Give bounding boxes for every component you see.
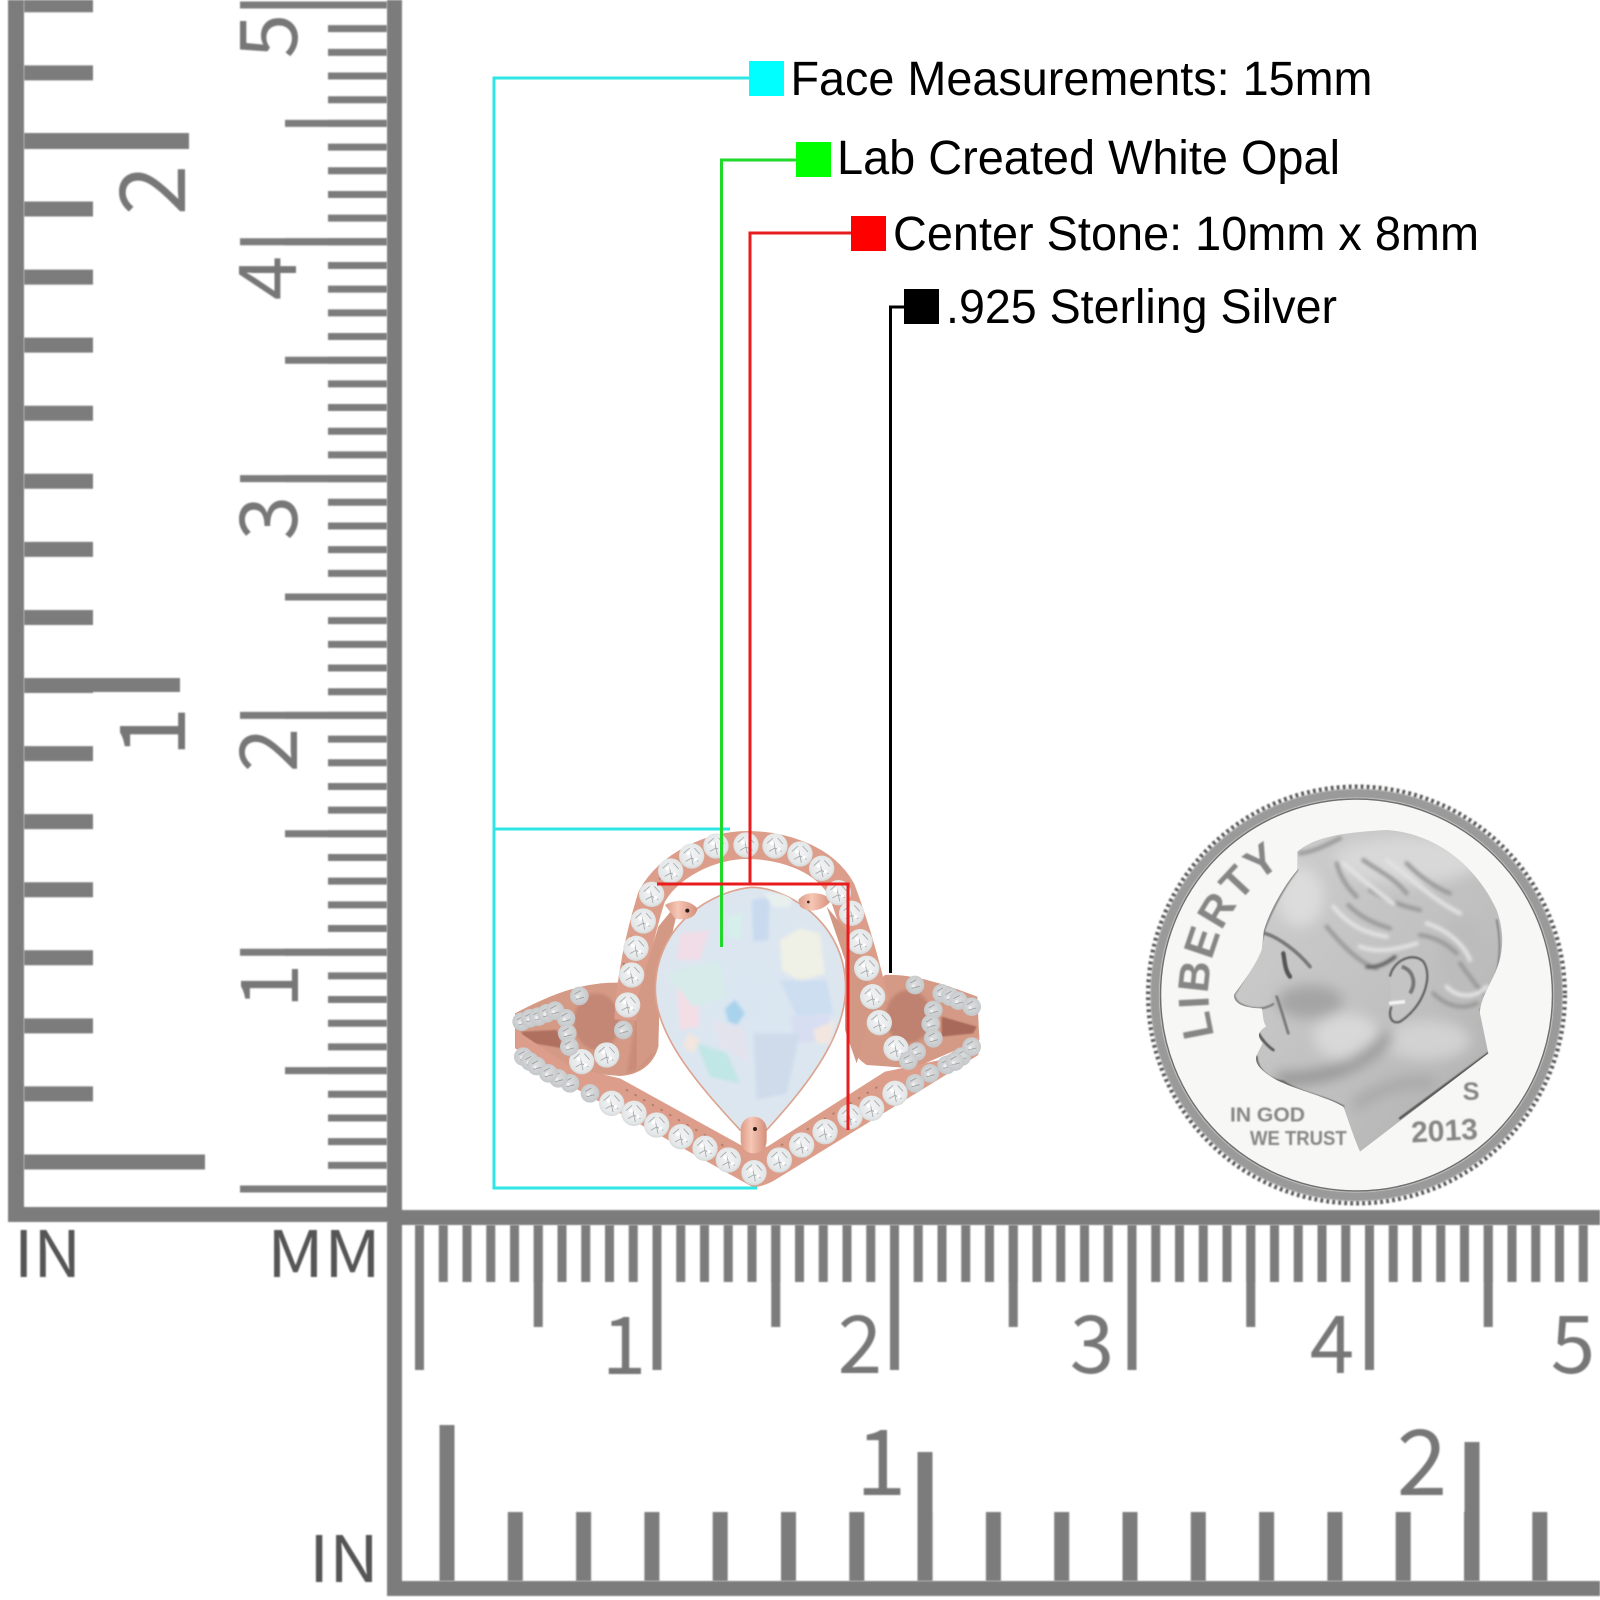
ring body: V band (516, 1030, 979, 1187)
inscription: 2013: 2013 (1410, 1113, 1479, 1149)
inscription: S: S (1463, 1078, 1480, 1106)
label: IN bottom: IN (309, 1509, 379, 1600)
horizontal ruler millimetre ticks (415, 1254, 1600, 1298)
callout lines (494, 78, 904, 1188)
ring body: shank lobes (515, 975, 979, 1076)
face shading (1277, 837, 1487, 1107)
horizontal ruler millimetre numbers (602, 1281, 1595, 1398)
pave stones on arch (569, 832, 909, 1074)
facial features (1234, 870, 1499, 1118)
centre stone bracket (657, 233, 851, 1130)
horizontal ruler millimetre numbers: 2 (838, 1281, 882, 1397)
horizontal ruler inch numbers: 2 (1397, 1390, 1447, 1522)
vertical ruler millimetre numbers: 5 (205, 14, 321, 58)
horizontal ruler inch numbers (856, 1390, 1447, 1522)
legend: face measurements: Face Measurements: 15mm (790, 53, 1372, 106)
legend (749, 53, 1479, 334)
inscription: IN GOD: IN GOD (1230, 1104, 1305, 1127)
vertical ruler inch ticks (24, 0, 205, 1170)
vertical ruler: inches and millimetres (8, 0, 402, 1222)
horizontal ruler: millimetres and inches (387, 1210, 1600, 1596)
legend: centre stone: Center Stone: 10mm x 8mm (893, 208, 1479, 261)
ruler unit labels (14, 1204, 381, 1600)
opal leader (722, 160, 796, 947)
horizontal ruler millimetre numbers: 1 (602, 1282, 646, 1398)
coin portrait (1234, 830, 1502, 1152)
horizontal ruler millimetre numbers: 3 (1070, 1281, 1114, 1397)
vertical ruler millimetre numbers (204, 14, 322, 1008)
legend: white opal: Lab Created White Opal (837, 132, 1340, 185)
silver leader (890, 307, 904, 973)
hair strands (1300, 838, 1487, 1007)
horizontal ruler frame (387, 1210, 1600, 1596)
ear (1389, 957, 1427, 1022)
inscription: LIBERTY: LIBERTY (1177, 840, 1273, 1040)
vertical ruler millimetre numbers: 3 (205, 496, 321, 540)
prong right (798, 893, 832, 911)
ring illustration (512, 832, 981, 1187)
vertical ruler inch numbers: 2 (80, 165, 212, 215)
label: MM: MM (267, 1204, 381, 1296)
horizontal ruler millimetre numbers: 5 (1551, 1281, 1595, 1397)
pave stones on shank (512, 976, 981, 1083)
coin inscriptions (1177, 840, 1480, 1150)
metal bead texture (622, 870, 883, 1153)
horizontal ruler inch numbers: 1 (856, 1390, 906, 1522)
horizontal ruler inch ticks (440, 1425, 1600, 1581)
coin: dime (1145, 784, 1568, 1206)
vertical ruler inch numbers: 1 (80, 707, 212, 757)
legend: sterling silver: .925 Sterling Silver (946, 281, 1337, 334)
coin rim (1148, 787, 1564, 1203)
vertical ruler millimetre ticks (314, 0, 358, 1192)
horizontal ruler millimetre numbers: 4 (1310, 1281, 1354, 1397)
prong left (665, 901, 697, 919)
vertical ruler millimetre numbers: 2 (205, 728, 321, 772)
vertical ruler millimetre numbers: 1 (206, 964, 322, 1008)
face measurement bracket (494, 78, 757, 1188)
vertical ruler millimetre numbers: 4 (204, 256, 320, 300)
ring body: halo arch (628, 845, 875, 1070)
pave stones on V band (549, 1037, 981, 1185)
label: IN left: IN (14, 1204, 81, 1296)
inscription: WE TRUST: WE TRUST (1250, 1127, 1347, 1150)
vertical ruler frame (8, 0, 402, 1222)
prong bottom (741, 1117, 767, 1153)
opal centre stone (655, 887, 846, 1130)
vertical ruler inch numbers (80, 165, 212, 757)
